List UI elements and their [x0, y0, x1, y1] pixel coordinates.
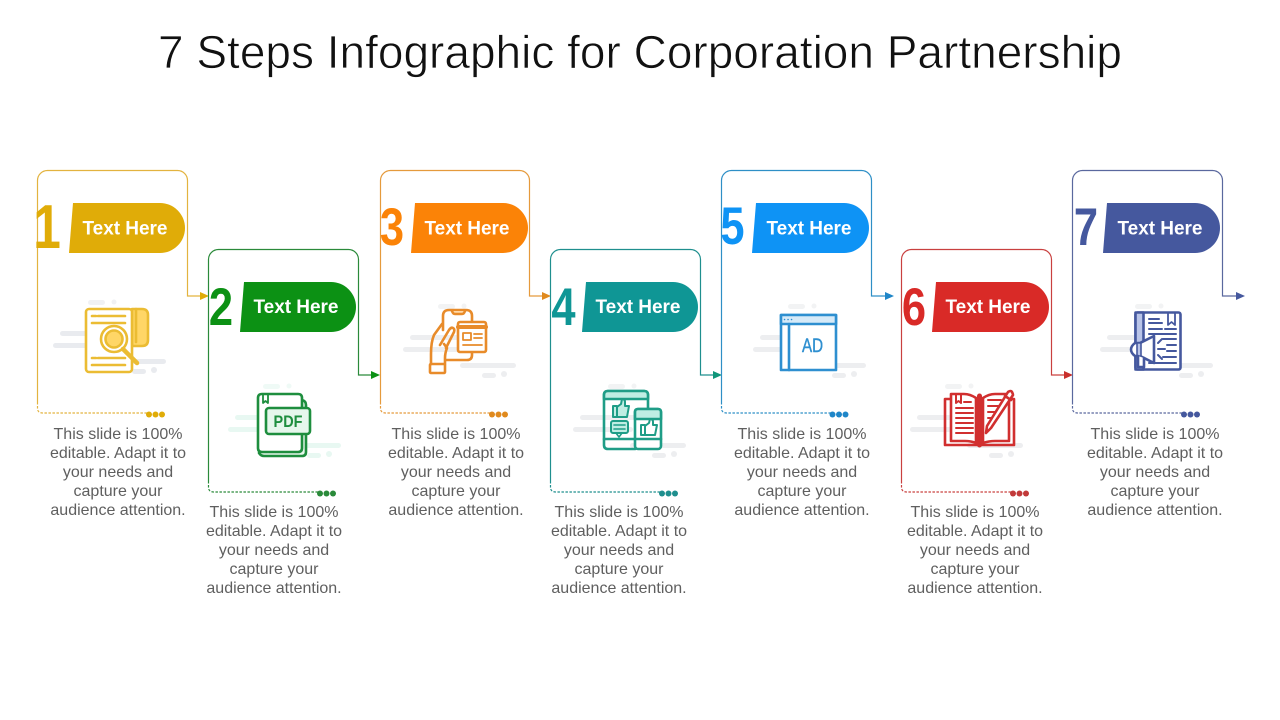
description: capture your — [412, 483, 501, 500]
description: editable. Adapt it to — [551, 523, 687, 540]
label tag: Text Here — [82, 218, 168, 240]
description: audience attention. — [907, 580, 1043, 597]
panel: step 3 — [380, 170, 551, 519]
number: 4 — [551, 278, 576, 337]
frame and arrow — [722, 170, 886, 413]
description: editable. Adapt it to — [907, 523, 1043, 540]
frame and arrow — [902, 250, 1065, 492]
number: 7 — [1074, 198, 1098, 257]
description: editable. Adapt it to — [1087, 445, 1223, 462]
description: your needs and — [747, 464, 857, 481]
description: capture your — [230, 561, 319, 578]
label tag: Text Here — [946, 297, 1030, 318]
number: 3 — [380, 198, 404, 257]
number: 6 — [902, 278, 926, 337]
icon: devices with thumbs up — [604, 391, 661, 449]
label tag: Text Here — [766, 218, 852, 240]
description: audience attention. — [50, 502, 186, 519]
description: audience attention. — [388, 502, 524, 519]
icon: document with magnifier — [86, 309, 148, 372]
frame and arrow — [550, 250, 714, 492]
frame and arrow — [208, 250, 372, 492]
description: your needs and — [920, 542, 1030, 559]
description: This slide is 100% — [911, 504, 1039, 521]
label tag — [1103, 203, 1220, 253]
description: This slide is 100% — [210, 504, 338, 521]
description: This slide is 100% — [738, 426, 866, 443]
icon: PDF file: PDF — [274, 413, 303, 431]
icon: ad window: AD — [802, 334, 823, 356]
description: your needs and — [564, 542, 674, 559]
label tag: Text Here — [254, 297, 338, 318]
description: your needs and — [1100, 464, 1210, 481]
label tag — [411, 203, 528, 253]
label tag — [932, 282, 1049, 332]
number: 5 — [720, 197, 745, 256]
description: editable. Adapt it to — [388, 445, 524, 462]
description: editable. Adapt it to — [734, 445, 870, 462]
label tag — [240, 282, 356, 332]
number: 2 — [209, 278, 233, 337]
frame and arrow — [1072, 170, 1237, 413]
description: This slide is 100% — [1091, 426, 1219, 443]
description: This slide is 100% — [555, 504, 683, 521]
description: audience attention. — [1087, 502, 1223, 519]
description: This slide is 100% — [392, 426, 520, 443]
description: This slide is 100% — [54, 426, 182, 443]
description: editable. Adapt it to — [206, 523, 342, 540]
panel: step 1 — [33, 170, 209, 519]
description: audience attention. — [734, 502, 870, 519]
description: capture your — [931, 561, 1020, 578]
description: audience attention. — [206, 580, 342, 597]
label tag: Text Here — [596, 297, 680, 318]
description: your needs and — [63, 464, 173, 481]
description: capture your — [74, 483, 163, 500]
description: your needs and — [401, 464, 511, 481]
number: 1 — [33, 192, 61, 261]
panel: step 4 — [550, 250, 722, 597]
description: editable. Adapt it to — [50, 445, 186, 462]
description: your needs and — [219, 542, 329, 559]
description: audience attention. — [551, 580, 687, 597]
panel: step 2 — [206, 250, 380, 597]
label tag: Text Here — [1118, 218, 1202, 240]
panel: step 6 — [902, 250, 1073, 597]
icon: ad window — [781, 315, 836, 370]
title: 7 Steps Infographic for Corporation Partnership — [158, 26, 1122, 78]
frame and arrow — [38, 170, 201, 413]
label tag — [582, 282, 698, 332]
description: capture your — [575, 561, 664, 578]
frame and arrow — [380, 170, 543, 413]
icon: open book and pen — [945, 391, 1014, 445]
label tag: Text Here — [424, 218, 510, 240]
label tag — [69, 203, 185, 253]
icon: book with megaphone — [1131, 312, 1180, 370]
icon: PDF file — [258, 394, 310, 456]
panel: step 7 — [1072, 170, 1245, 519]
description: capture your — [758, 483, 847, 500]
label tag — [752, 203, 869, 253]
icon: hand holding phone — [430, 310, 486, 373]
panel: step 5 — [720, 170, 894, 519]
description: capture your — [1111, 483, 1200, 500]
